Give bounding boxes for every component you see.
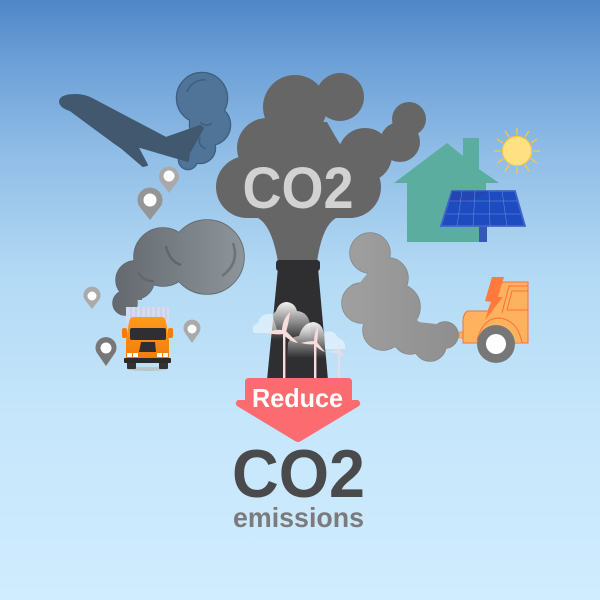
CO2 heading: CO2 <box>232 436 365 512</box>
electric car <box>459 277 528 363</box>
wind turbines with clouds <box>253 302 346 378</box>
truck smoke <box>113 220 244 315</box>
truck <box>122 307 173 371</box>
reduce arrow <box>236 378 360 442</box>
car exhaust smoke <box>342 233 458 361</box>
CO2 label on cloud: CO2 <box>242 156 354 221</box>
airplane silhouette <box>60 95 203 166</box>
plane smoke <box>177 73 230 169</box>
solar panel <box>441 191 525 242</box>
factory chimney <box>267 260 328 380</box>
location pins <box>84 167 200 366</box>
reduce label: Reduce <box>252 383 343 413</box>
emissions subheading: emissions <box>233 502 364 533</box>
main smoke cloud <box>216 73 426 262</box>
sun <box>494 128 540 174</box>
house with chimney <box>394 138 499 242</box>
